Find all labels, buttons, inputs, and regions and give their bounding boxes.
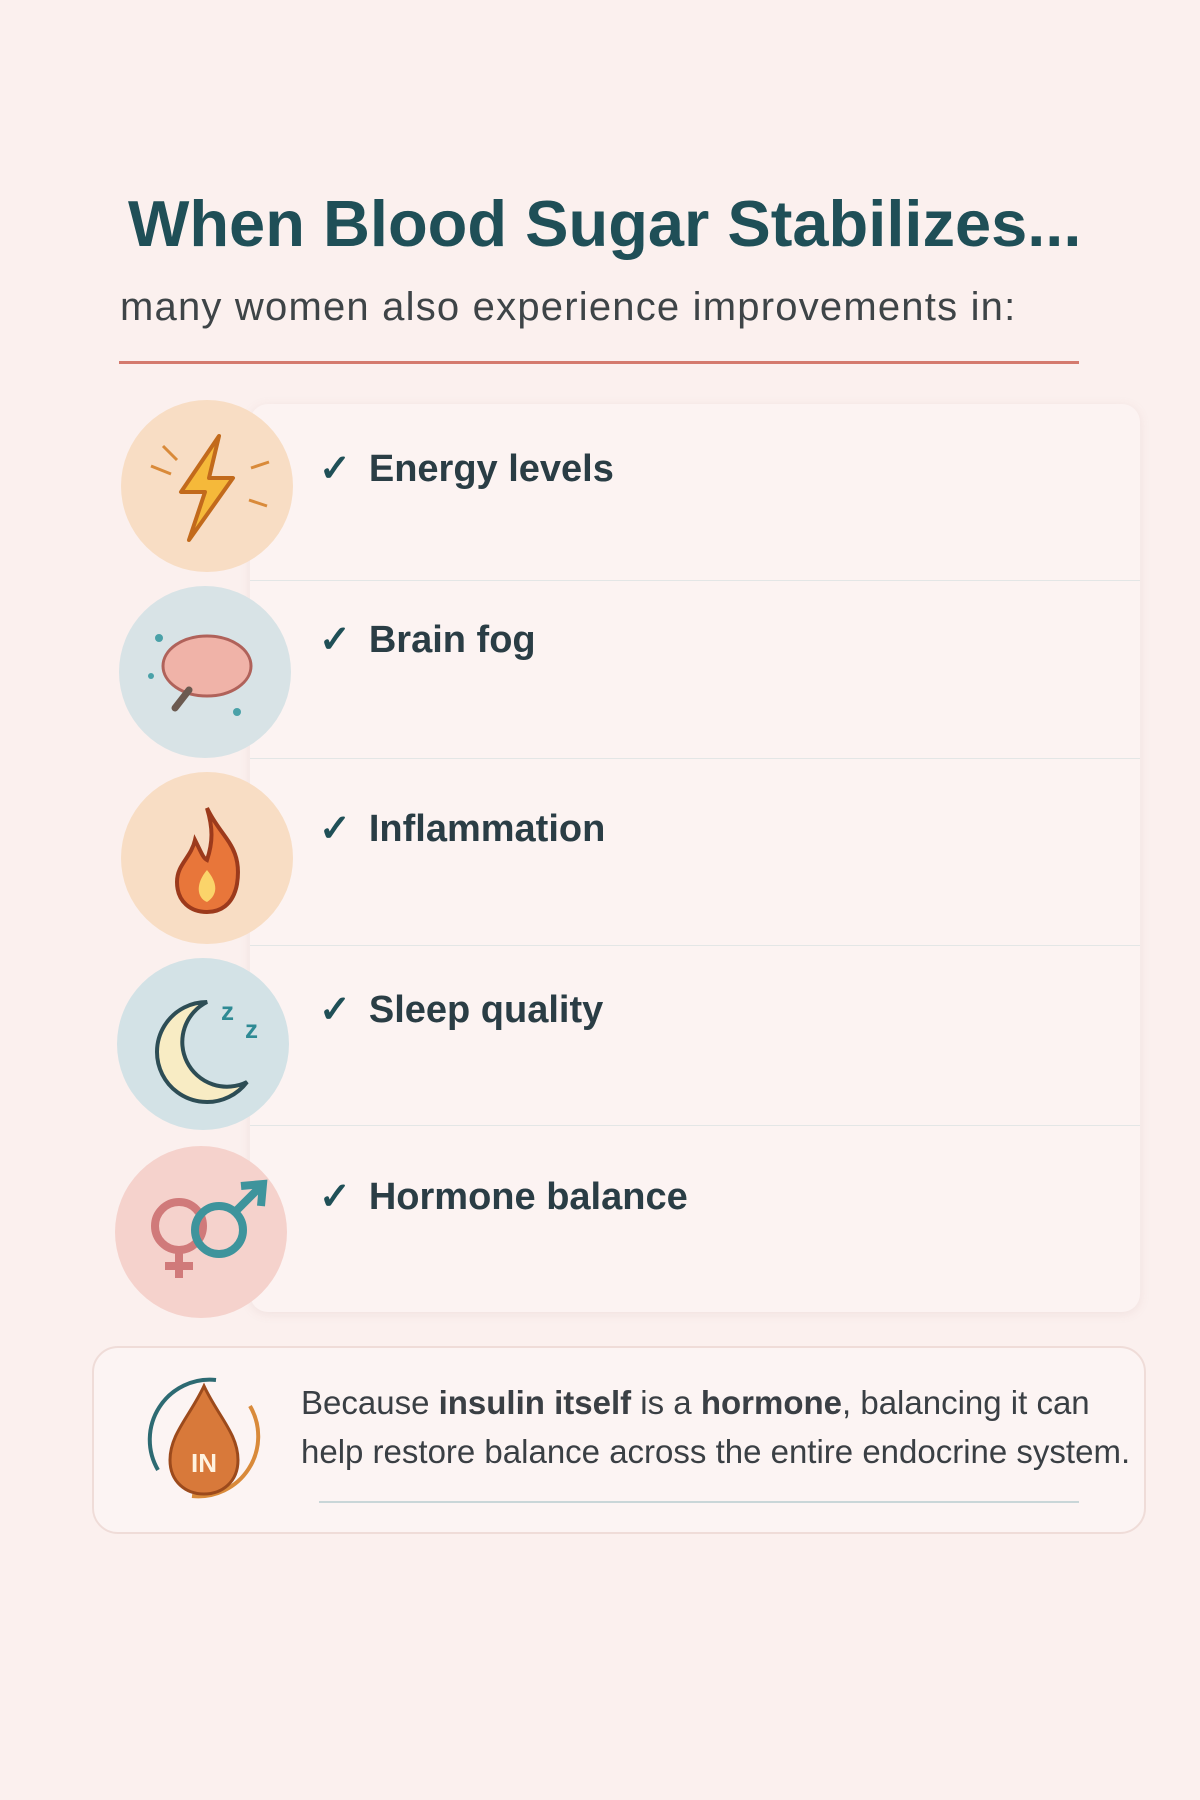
icon: insulin drop: IN	[191, 1448, 217, 1478]
label: hormone balance: ✓ Hormone balance	[319, 1176, 688, 1218]
icon: brain	[119, 586, 291, 758]
icon: energy lightning	[121, 400, 293, 572]
panel: improvements list	[250, 404, 1140, 1312]
label: sleep quality: ✓ Sleep quality	[319, 989, 603, 1031]
label: brain fog: ✓ Brain fog	[319, 619, 536, 661]
callout: insulin note	[92, 1346, 1146, 1534]
icon: moon	[117, 958, 289, 1130]
icon: gender symbols	[115, 1146, 287, 1318]
icon: flame	[121, 772, 293, 944]
callout text: help restore balance across the entire endocrine system.	[301, 1433, 1130, 1470]
callout text	[301, 1384, 1130, 1470]
label: inflammation: ✓ Inflammation	[319, 808, 605, 850]
icon: insulin drop	[148, 1378, 260, 1498]
callout text: Because insulin itself is a hormone, balancing it can	[301, 1384, 1090, 1421]
title: When Blood Sugar Stabilizes...	[128, 187, 1081, 260]
icon: moon: z	[221, 996, 234, 1026]
icon: moon: z	[245, 1014, 258, 1044]
label: energy levels: ✓ Energy levels	[319, 448, 614, 490]
subtitle: many women also experience improvements in:	[120, 285, 1016, 329]
